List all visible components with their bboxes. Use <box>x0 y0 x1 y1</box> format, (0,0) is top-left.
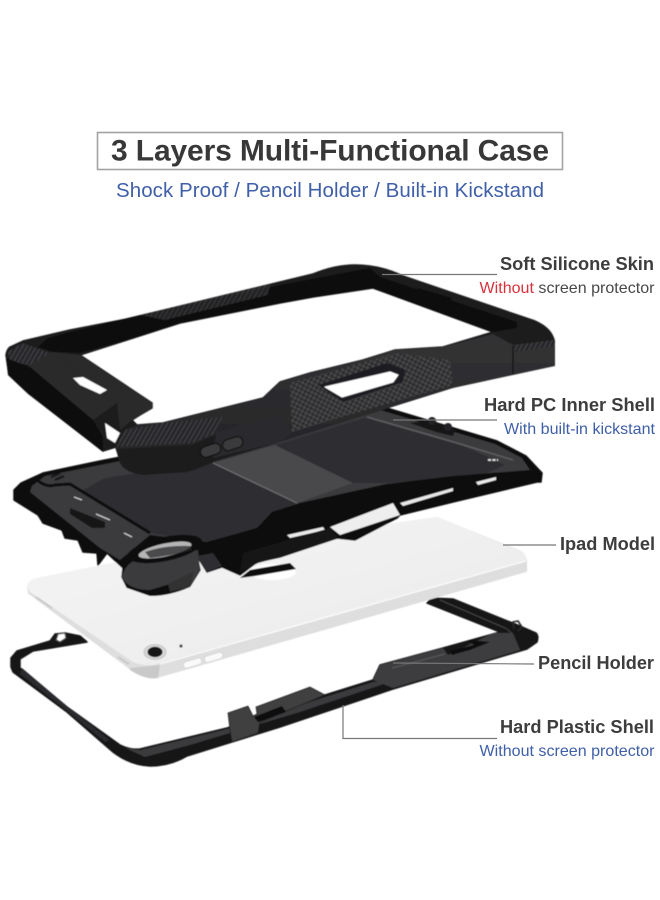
lower corner with pencil ring <box>122 550 200 592</box>
rear clips <box>240 528 337 572</box>
layer: iPad model <box>27 517 526 678</box>
layer: hard plastic shell <box>11 598 538 766</box>
callout: hard PC inner shell: Hard PC Inner Shell <box>484 395 655 415</box>
callout: hard plastic shell <box>343 705 655 760</box>
callout: soft silicone skin: Soft Silicone Skin <box>500 254 654 274</box>
recessed band around the window <box>38 268 517 353</box>
ribbed top grip <box>140 284 270 320</box>
callout: soft silicone skin: Without screen protector <box>480 280 655 297</box>
shell top surface <box>30 410 530 560</box>
callout: pencil holder: Pencil Holder <box>538 653 654 673</box>
title box: 3 Layers Multi-Functional Case <box>111 134 549 168</box>
pencil holder <box>373 633 520 688</box>
frame body <box>6 265 554 474</box>
callout: soft silicone skin <box>382 254 655 297</box>
left wing flat and side <box>30 363 117 420</box>
apple logo area <box>248 564 296 580</box>
exploded view of the case layers <box>6 265 555 766</box>
kickstand panel <box>213 445 353 503</box>
rear hinge <box>410 420 455 436</box>
white gap <box>105 423 120 443</box>
callout: hard plastic shell: Hard Plastic Shell <box>500 717 654 737</box>
layer: hard PC inner shell <box>14 406 542 596</box>
hexagon grip texture <box>290 353 453 432</box>
left slot <box>73 377 107 394</box>
callout: hard PC inner shell <box>393 395 656 438</box>
front slot <box>318 363 405 402</box>
callout: iPad model: Ipad Model <box>560 534 655 554</box>
ribbed corner grip <box>117 417 223 447</box>
clips <box>228 687 325 742</box>
front strip <box>115 334 555 475</box>
callout: hard plastic shell: Without screen protector <box>480 743 655 760</box>
subtitle: Shock Proof / Pencil Holder / Built-in Kickstand <box>116 179 544 202</box>
shell base with rim <box>14 406 542 595</box>
side buttons <box>199 435 244 459</box>
black clip above iPad <box>240 563 296 578</box>
callout: hard PC inner shell: With built-in kickstant <box>504 421 656 438</box>
vents and slits <box>488 459 498 461</box>
layer: soft silicone skin <box>6 265 555 475</box>
volume buttons <box>183 651 224 669</box>
camera <box>144 644 183 660</box>
straps and gaps on the lower edge <box>207 470 537 553</box>
